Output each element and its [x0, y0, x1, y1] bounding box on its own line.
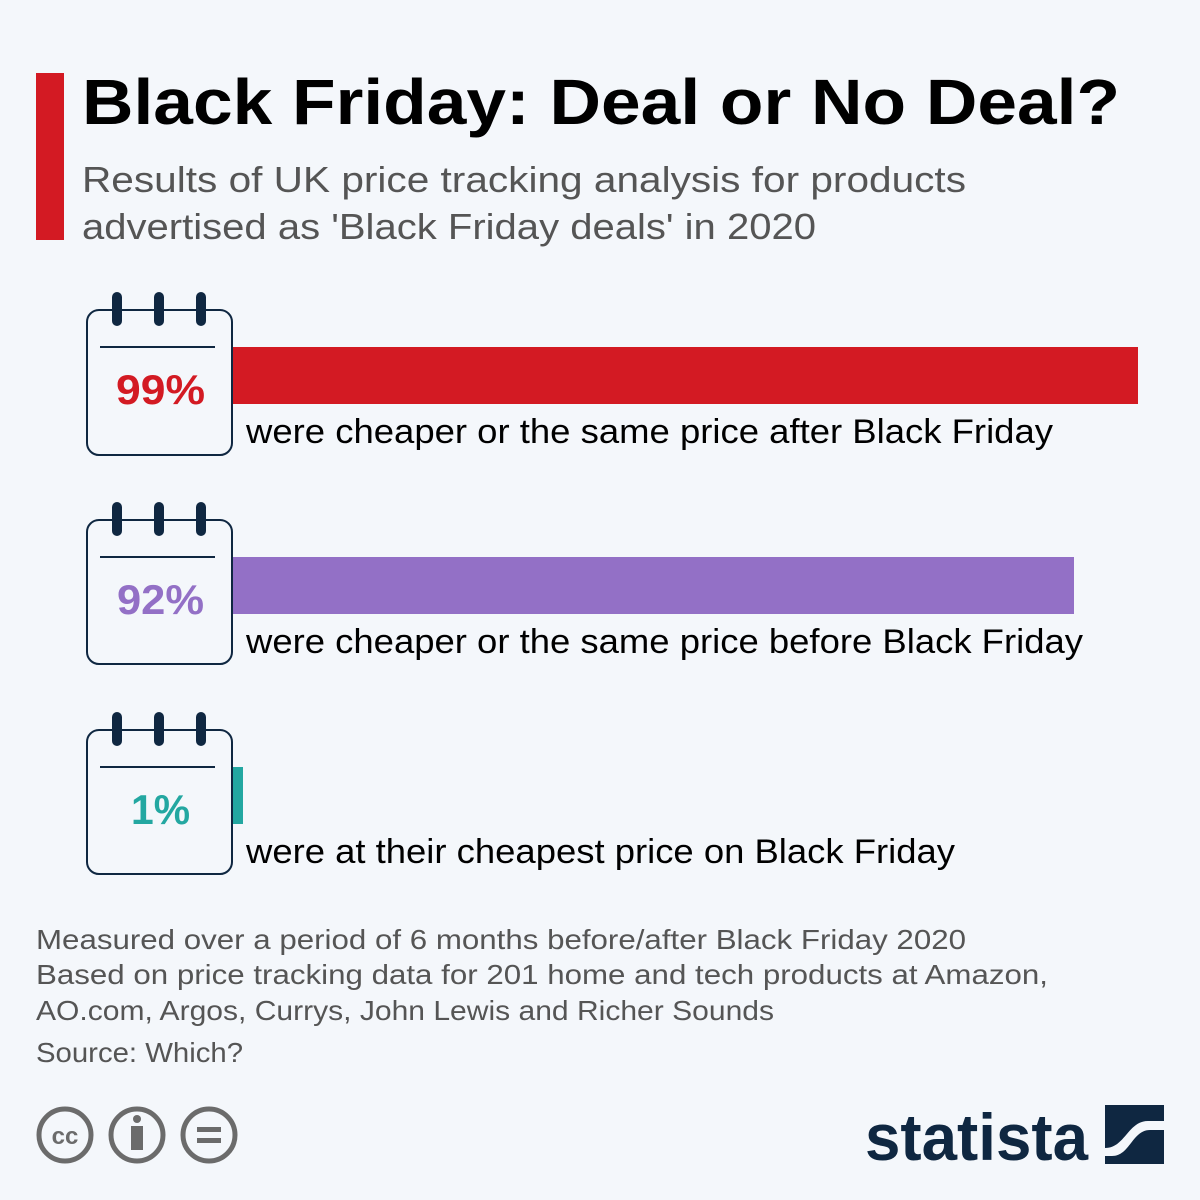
- label: were at their cheapest price on Black Friday: [245, 833, 955, 871]
- icon: calendar 99%: [87, 297, 232, 455]
- footnotes: AO.com, Argos, Currys, John Lewis and Richer Sounds: [36, 995, 774, 1026]
- icon: calendar 92%: 92%: [117, 576, 204, 623]
- row 1: [87, 297, 1138, 455]
- icons: creative commons: [39, 1109, 235, 1161]
- subtitle: Results of UK price tracking analysis for products: [82, 159, 966, 200]
- footnotes: [36, 924, 1048, 1068]
- footnotes: Source: Which?: [36, 1037, 243, 1068]
- icon: calendar 1%: [87, 717, 232, 874]
- bar: 99%: [233, 347, 1138, 404]
- title: Black Friday: Deal or No Deal?: [82, 66, 1120, 138]
- footnotes: Based on price tracking data for 201 home and tech products at Amazon,: [36, 959, 1048, 990]
- bar: 92%: [233, 557, 1074, 614]
- subtitle: advertised as 'Black Friday deals' in 2020: [82, 206, 816, 247]
- title accent bar: [36, 73, 64, 240]
- logo: statista: statista: [865, 1100, 1089, 1174]
- icon: calendar 99%: 99%: [116, 366, 205, 413]
- subtitle: [82, 159, 966, 247]
- label: were cheaper or the same price after Black Friday: [245, 413, 1053, 451]
- icons: creative commons: cc: [52, 1123, 78, 1150]
- footnotes: Measured over a period of 6 months before/after Black Friday 2020: [36, 924, 966, 955]
- bar: 1%: [233, 767, 243, 824]
- icon: calendar 1%: 1%: [131, 786, 190, 833]
- icon: calendar 92%: [87, 507, 232, 664]
- row 3: [87, 717, 955, 874]
- row 2: [87, 507, 1083, 664]
- label: were cheaper or the same price before Black Friday: [245, 623, 1083, 661]
